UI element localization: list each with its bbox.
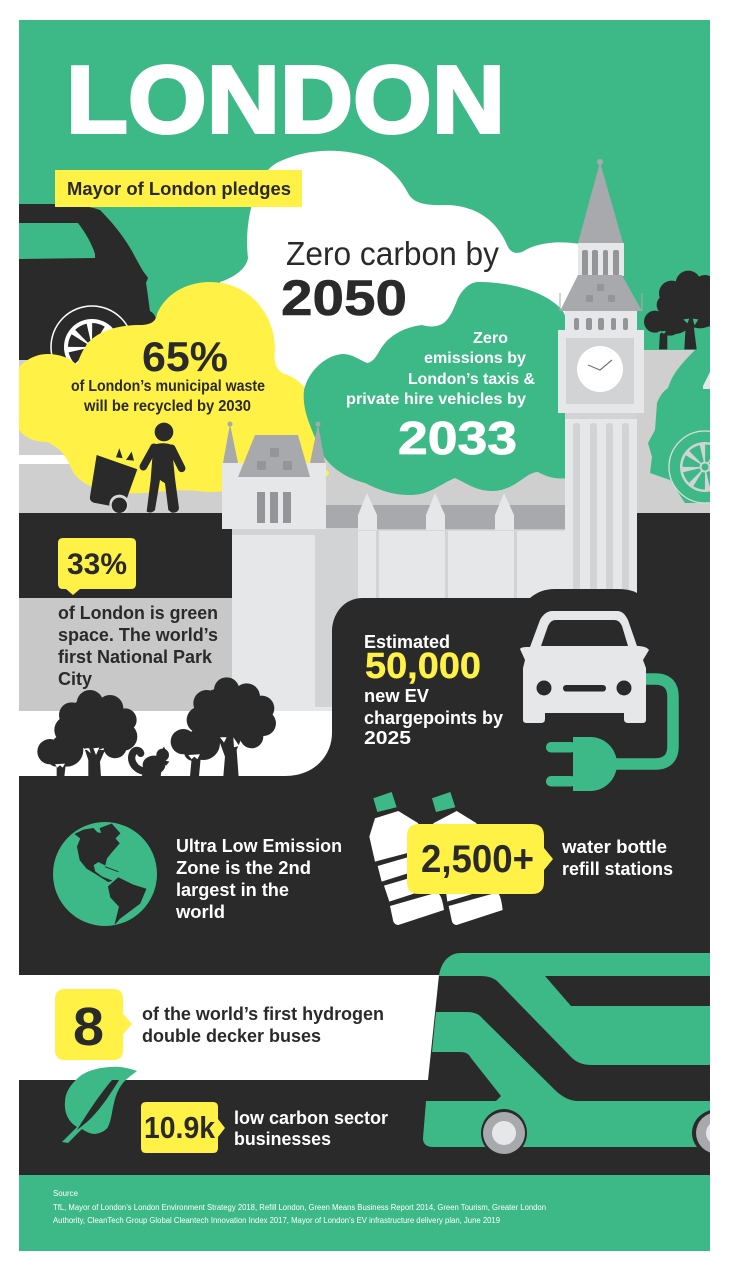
bubble: 10.9k — [141, 1102, 225, 1153]
icon: water bottles — [369, 792, 503, 925]
bubble: 33%: 33% — [67, 548, 127, 581]
bubble: 2,500+ — [407, 824, 553, 894]
text: zero emissions 2033: London’s taxis & — [408, 371, 535, 388]
yellow cloud — [19, 282, 329, 493]
text: green space: first National Park — [58, 647, 213, 667]
green space block — [19, 598, 232, 712]
text: low carbon businesses: businesses — [234, 1129, 331, 1149]
text: low carbon businesses — [235, 1110, 388, 1145]
bubble: 8: 8 — [73, 997, 104, 1057]
text: zero carbon 2050: 2050 — [281, 270, 407, 326]
text: hydrogen buses — [142, 1006, 383, 1042]
right road band top — [644, 350, 695, 360]
bubble: 2,500+: 2,500+ — [421, 838, 534, 881]
road markings — [19, 455, 70, 464]
text: water bottle refill — [561, 837, 673, 879]
text: ultra low emission zone: world — [175, 902, 225, 922]
bubble: 10.9k: 10.9k — [144, 1110, 216, 1145]
text: water bottle refill: refill stations — [562, 859, 673, 879]
icon: trees behind big ben — [644, 270, 710, 350]
text: 65% recycled: of London’s municipal waste — [71, 378, 265, 395]
text: hydrogen buses: double decker buses — [142, 1026, 321, 1046]
dark band right of tower — [637, 513, 710, 593]
icon: green car silhouette — [648, 350, 710, 504]
bubble: 33% — [58, 538, 136, 595]
icon: EV car and plug — [520, 611, 673, 791]
panel: source footer — [19, 1175, 710, 1251]
icon: double decker bus — [423, 953, 730, 1157]
building: lower tower — [232, 528, 358, 712]
text: zero carbon 2050 — [281, 235, 499, 326]
heading: mayor pledges: Mayor of London pledges — [67, 179, 291, 199]
text: hydrogen buses: of the world’s first hydrogen — [142, 1004, 384, 1024]
text: EV chargepoints: chargepoints by — [364, 708, 503, 728]
text: EV chargepoints: 50,000 — [365, 645, 481, 686]
text: 65% recycled: 65% — [142, 333, 228, 380]
heading: mayor pledges — [55, 170, 302, 207]
bubble: 8 — [55, 989, 132, 1060]
text: zero emissions 2033 — [346, 330, 535, 464]
icon: park trees — [37, 677, 276, 777]
title: LONDON — [66, 46, 505, 154]
green cloud — [304, 282, 570, 495]
text: ultra low emission zone: Zone is the 2nd — [176, 858, 311, 878]
road band — [19, 360, 710, 513]
panel: white bus section — [19, 975, 439, 1080]
text: 65% recycled — [71, 333, 265, 415]
panel: source footer: Source — [53, 1189, 79, 1198]
panel: dark lower section — [19, 589, 710, 1176]
text: EV chargepoints: new EV — [364, 686, 429, 706]
icon: person with recycling bin — [90, 423, 182, 515]
panel: source footer: Authority, CleanTech Group Global Cleantech Innovation Index 2017, Mayor of London’s EV infrastructure delivery plan, June 2019 — [53, 1216, 501, 1225]
text: zero emissions 2033: emissions by — [424, 350, 526, 367]
text: 65% recycled: will be recycled by 2030 — [83, 398, 251, 415]
icon: squirrel — [132, 747, 169, 777]
text: EV chargepoints: 2025 — [364, 728, 411, 748]
text: green space: of London is green — [58, 603, 218, 623]
text: green space: space. The world’s — [58, 625, 218, 645]
text: zero emissions 2033: Zero — [473, 330, 508, 347]
text: EV chargepoints — [364, 632, 503, 748]
text: ultra low emission zone: Ultra Low Emission — [176, 836, 342, 856]
icon: globe — [53, 822, 157, 926]
text: zero carbon 2050: Zero carbon by — [286, 235, 499, 272]
text: green space: City — [58, 669, 92, 689]
dark band under road — [19, 513, 232, 599]
text: ultra low emission zone: largest in the — [176, 880, 289, 900]
icon: leaf — [62, 1067, 137, 1143]
panel: green sky background — [19, 20, 710, 350]
panel: source footer: TfL, Mayor of London’s London Environment Strategy 2018, Refill London, Green Means Business Report 2014, Green Tourism, Greater London — [53, 1203, 546, 1212]
building: parliament gatehouse — [222, 422, 326, 529]
icon: dark car silhouette — [19, 204, 156, 365]
text: ultra low emission zone — [175, 836, 342, 922]
building: big ben — [558, 159, 644, 603]
text: zero emissions 2033: private hire vehicles by — [346, 391, 526, 408]
text: water bottle refill: water bottle — [561, 837, 667, 857]
building: parliament long block — [326, 493, 566, 600]
text: EV chargepoints: Estimated — [364, 632, 450, 652]
white cloud — [220, 151, 580, 400]
text: green space — [58, 603, 218, 689]
white park ground — [19, 711, 332, 712]
text: low carbon businesses: low carbon sector — [234, 1108, 388, 1128]
text: zero emissions 2033: 2033 — [398, 412, 517, 464]
